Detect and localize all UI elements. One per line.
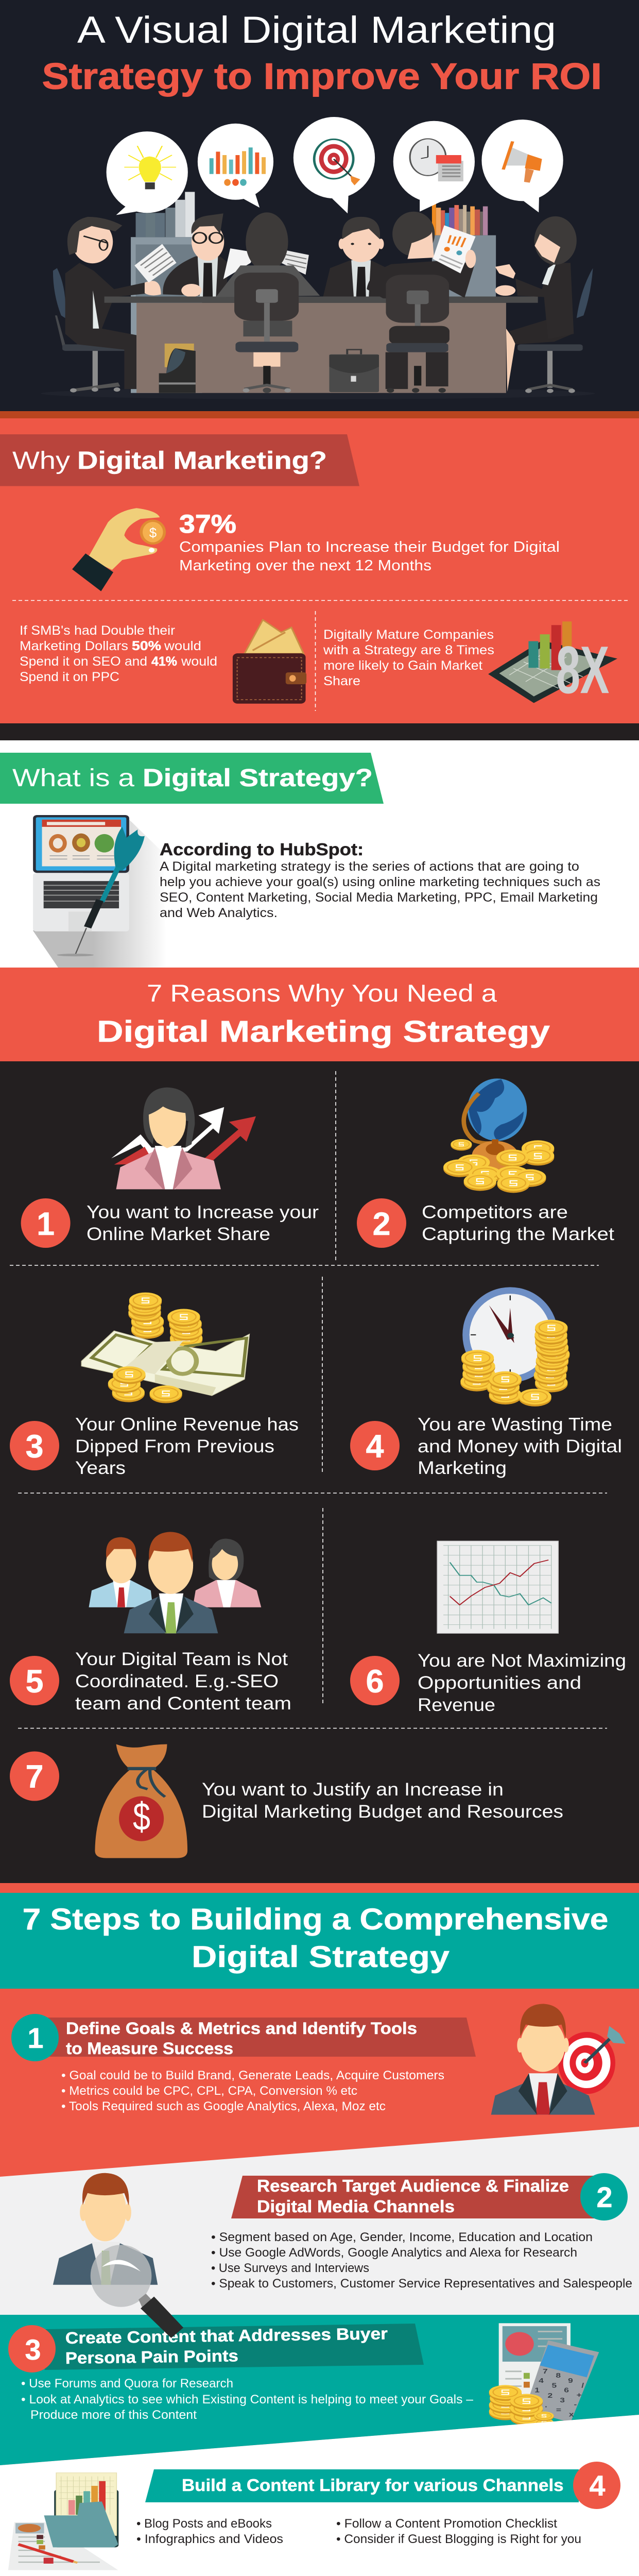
heading banner: step 2	[231, 2173, 628, 2221]
text: reason 6: Revenue	[418, 1695, 495, 1715]
icon: report, calculator and coins	[489, 2323, 599, 2430]
bullets: step 4 left: • Infographics and Videos	[136, 2532, 283, 2546]
icon: folder and charts	[8, 2473, 118, 2570]
speech bubble: target	[293, 117, 375, 213]
text: according to hubspot: and Web Analytics.	[160, 906, 278, 920]
text: SMB spending: If SMB's had Double their	[20, 623, 175, 638]
text: reason 1: Online Market Share	[87, 1224, 270, 1244]
coin dollar sign: $	[149, 525, 157, 540]
heading banner: step 4: Build a Content Library for various Channels	[182, 2476, 563, 2495]
text: SMB spending: 41%	[151, 654, 177, 669]
number badge 5	[10, 1656, 59, 1705]
number badge 6: 6	[366, 1664, 384, 1700]
bullets: step 4 right: • Consider if Guest Blogging is Right for you	[336, 2532, 581, 2546]
heading banner: step 4	[145, 2462, 620, 2509]
bullets: step 2: • Use Surveys and Interviews	[211, 2261, 369, 2275]
icon: report, calculator and coins: 9	[568, 2377, 573, 2385]
reason 6	[350, 1541, 626, 1715]
panel: 7 reasons heading: 7 Reasons Why You Need a	[147, 979, 497, 1007]
icon: report, calculator and coins: =	[556, 2406, 561, 2414]
text: reason 5: Coordinated. E.g.-SEO	[75, 1671, 279, 1691]
number badge 7: 7	[25, 1759, 44, 1795]
text: digitally mature companies: with a Strategy are 8 Times	[323, 643, 494, 657]
stat: 37 percent: Marketing over the next 12 Months	[179, 557, 431, 574]
heading banner: step 3: Create Content that Addresses Buyer	[65, 2324, 388, 2347]
person: man centre	[323, 217, 390, 297]
icon: hand holding coin	[72, 508, 166, 591]
number badge 6	[350, 1656, 400, 1705]
bullets: step 1: • Goal could be to Build Brand, Generate Leads, Acquire Customers	[61, 2069, 444, 2082]
person: woman on right	[495, 216, 593, 393]
bullets: step 1: • Tools Required such as Google Analytics, Alexa, Moz etc	[61, 2099, 386, 2113]
panel: 7 reasons heading	[0, 968, 639, 1061]
title	[42, 9, 602, 97]
bullets: step 3	[21, 2377, 474, 2422]
text: SMB spending: would	[181, 654, 217, 669]
icon: report, calculator and coins: 3	[560, 2397, 565, 2404]
stat: 37 percent: 37%	[179, 510, 236, 538]
heading banner: step 1	[11, 2014, 476, 2061]
panel: 7 reasons heading: Digital Marketing Strategy	[97, 1015, 550, 1048]
icon: line chart	[437, 1541, 558, 1633]
panel: 7 reasons	[0, 1061, 639, 1893]
icon: 8x growth chart: 8X	[556, 632, 609, 707]
title: Strategy to Improve Your ROI	[42, 57, 602, 97]
bullets: step 4 left	[136, 2517, 283, 2546]
desk	[105, 297, 538, 393]
text: SMB spending: Spend it on SEO and	[20, 654, 147, 669]
number badge 5: 5	[25, 1664, 44, 1700]
icon: businessman with target	[491, 2004, 626, 2115]
icon: 8x growth chart	[488, 621, 617, 707]
number badge 7	[10, 1752, 59, 1801]
text: reason 6	[418, 1651, 626, 1715]
text: reason 4	[418, 1415, 622, 1478]
icon: magnifying glass	[91, 2245, 183, 2338]
text: according to hubspot	[160, 840, 600, 920]
reason 1	[21, 1088, 319, 1248]
text: SMB spending: 50%	[132, 639, 161, 653]
title: A Visual Digital Marketing	[77, 9, 556, 51]
bullets: step 2	[211, 2230, 632, 2291]
heading banner: step 1: to Measure Success	[66, 2039, 233, 2058]
heading banner: step 1: Define Goals & Metrics and Identify Tools	[66, 2019, 417, 2038]
text: reason 1: You want to Increase your	[87, 1202, 319, 1222]
person: man back view with chart	[367, 212, 476, 393]
speech bubble: megaphone	[481, 120, 563, 212]
person: woman back view	[216, 212, 320, 393]
text: digitally mature companies: Digitally Mature Companies	[323, 628, 494, 642]
panel: 7 steps heading: Digital Strategy	[192, 1940, 450, 1974]
text: reason 4: Marketing	[418, 1458, 507, 1478]
text: SMB spending: Marketing Dollars	[20, 639, 128, 653]
heading banner: step 3: 3	[25, 2333, 41, 2366]
speech bubble: clock and calendar	[393, 121, 475, 212]
icon: report, calculator and coins: 2	[548, 2392, 552, 2399]
text: according to hubspot: A Digital marketing strategy is the series of actions that are going to	[160, 859, 579, 874]
speech bubble: bar chart	[198, 124, 273, 208]
folder holder under desk	[159, 344, 196, 393]
text: reason 6: Opportunities and	[418, 1673, 581, 1693]
text: SMB spending: Spend it on PPC	[20, 670, 119, 684]
panel: what is a digital strategy	[0, 740, 639, 990]
text: reason 2: Capturing the Market	[422, 1224, 614, 1244]
reason 4	[350, 1287, 622, 1478]
text: reason 4: You are Wasting Time	[418, 1415, 612, 1434]
number badge 2: 2	[372, 1206, 391, 1242]
icon: report, calculator and coins: .	[545, 2402, 547, 2409]
papers on table	[223, 248, 309, 279]
text: reason 7: Digital Marketing Budget and Resources	[202, 1802, 563, 1822]
text: reason 3: Years	[75, 1458, 126, 1478]
bullets: step 3: Produce more of this Content	[30, 2408, 197, 2422]
bullets: step 2: • Speak to Customers, Customer Service Representatives and Salespeople	[211, 2277, 632, 2291]
text: reason 1	[87, 1202, 319, 1244]
text: SMB spending: would	[164, 639, 201, 653]
stat: 37 percent	[179, 510, 560, 574]
number badge 3: 3	[25, 1429, 44, 1465]
text: digitally mature companies	[323, 628, 494, 688]
number badge 4: 4	[366, 1429, 384, 1465]
number badge 3	[10, 1421, 59, 1470]
heading banner: step 3: Persona Pain Points	[65, 2346, 238, 2367]
reason 2	[357, 1078, 614, 1248]
text: reason 5: Your Digital Team is Not	[75, 1649, 288, 1669]
number badge 2	[357, 1198, 406, 1248]
icon: clock with coins	[460, 1287, 569, 1406]
text: reason 2: Competitors are	[422, 1202, 568, 1222]
cabinets, binders and books behind the team	[131, 192, 496, 393]
briefcase	[329, 350, 379, 392]
icon: report, calculator and coins: 6	[564, 2387, 569, 2394]
icon: globe on coins	[443, 1078, 554, 1193]
person: man with glasses	[163, 213, 228, 297]
icon: money bag	[95, 1744, 187, 1858]
icon: report, calculator and coins: +	[576, 2392, 582, 2399]
heading banner: step 3	[8, 2324, 424, 2372]
bullets: step 4 left: • Blog Posts and eBooks	[136, 2517, 272, 2531]
icon: report, calculator and coins: /	[581, 2382, 584, 2389]
text: reason 7: You want to Justify an Increase in	[202, 1780, 504, 1800]
reason 5	[10, 1532, 291, 1714]
illustration: team meeting	[41, 117, 595, 399]
panel: step 2 background and content	[0, 2112, 639, 2315]
heading banner: why digital marketing	[0, 434, 359, 486]
icon: businessman	[53, 2173, 158, 2285]
heading banner: why digital marketing: Digital Marketing?	[77, 447, 327, 474]
heading banner: step 4: 4	[589, 2469, 606, 2502]
bullets: step 3: • Look at Analytics to see which Existing Content is helping to meet your Goals –	[21, 2393, 474, 2406]
panel: 7 steps heading	[0, 1893, 639, 1989]
bullets: step 1: • Metrics could be CPC, CPL, CPA, Conversion % etc	[61, 2084, 357, 2098]
icon: woman with rising arrows	[111, 1088, 256, 1189]
text: according to hubspot: SEO, Content Marketing, Social Media Marketing, PPC, Email Marketing	[160, 890, 598, 905]
text: according to hubspot: help you achieve your goal(s) using online marketing techniques such as	[160, 875, 600, 889]
text: reason 3: Dipped From Previous	[75, 1436, 274, 1456]
icon: report, calculator and coins: 7	[543, 2368, 548, 2375]
icon: team of three	[89, 1532, 261, 1633]
icon: report, calculator and coins: 1	[534, 2387, 540, 2394]
bullets: step 3: • Use Forums and Quora for Research	[21, 2377, 233, 2391]
icon: report, calculator and coins: 5	[551, 2382, 557, 2389]
heading banner: what is a digital strategy	[0, 753, 384, 804]
person: left man with paper	[53, 217, 177, 393]
heading banner: step 2: Research Target Audience & Finalize	[257, 2176, 569, 2195]
text: SMB spending	[20, 623, 217, 684]
bullets: step 4 right	[336, 2517, 581, 2546]
heading banner: what is a digital strategy: What is a	[12, 765, 134, 792]
panel: step 4	[0, 2415, 639, 2576]
icon: wallet	[233, 620, 306, 704]
text: reason 4: and Money with Digital	[418, 1436, 622, 1456]
panel: 7 steps heading: 7 Steps to Building a Comprehensive	[23, 1903, 609, 1936]
number badge 1: 1	[37, 1206, 55, 1242]
text: reason 3: Your Online Revenue has	[75, 1415, 299, 1434]
number badge 4	[350, 1421, 400, 1470]
icon: report, calculator and coins: 4	[539, 2377, 544, 2385]
heading banner: step 2: Digital Media Channels	[257, 2197, 455, 2216]
panel: step 1	[0, 1989, 639, 2285]
bullets: step 2: • Use Google AdWords, Google Analytics and Alexa for Research	[211, 2246, 577, 2260]
number badge 1	[21, 1198, 71, 1248]
heading banner: step 2: 2	[596, 2181, 613, 2213]
text: digitally mature companies: Share	[323, 674, 360, 688]
icon: report, calculator and coins: x	[569, 2411, 574, 2418]
speech bubble: idea	[107, 131, 188, 215]
text: digitally mature companies: more likely to Gain Market	[323, 658, 482, 673]
text: according to hubspot: According to HubSpot:	[160, 840, 364, 859]
money bag dollar sign: $	[133, 1795, 150, 1839]
heading banner: step 1: 1	[27, 2022, 44, 2054]
text: reason 5: team and Content team	[75, 1693, 291, 1714]
text: reason 3	[75, 1415, 299, 1478]
icon: laptop with dart	[33, 815, 167, 990]
reason 3	[10, 1293, 299, 1478]
bullets: step 2: • Segment based on Age, Gender, Income, Education and Location	[211, 2230, 593, 2244]
text: reason 7	[202, 1780, 563, 1822]
text: reason 6: You are Not Maximizing	[418, 1651, 626, 1671]
panel: why digital marketing	[0, 418, 639, 740]
icon: report, calculator and coins: -	[574, 2401, 577, 2408]
icon: report, calculator and coins: 8	[556, 2372, 561, 2379]
stat: 37 percent: Companies Plan to Increase their Budget for Digital	[179, 539, 560, 555]
bullets: step 1	[61, 2069, 444, 2113]
panel: header	[0, 0, 639, 418]
reason 7	[10, 1744, 563, 1858]
heading banner: what is a digital strategy: Digital Strategy?	[143, 765, 373, 792]
heading banner: why digital marketing: Why	[12, 447, 70, 474]
text: reason 5	[75, 1649, 291, 1714]
bullets: step 4 right: • Follow a Content Promotion Checklist	[336, 2517, 557, 2531]
text: reason 2	[422, 1202, 614, 1244]
panel: step 3	[0, 2315, 639, 2465]
icon: cash and coins	[81, 1293, 249, 1403]
